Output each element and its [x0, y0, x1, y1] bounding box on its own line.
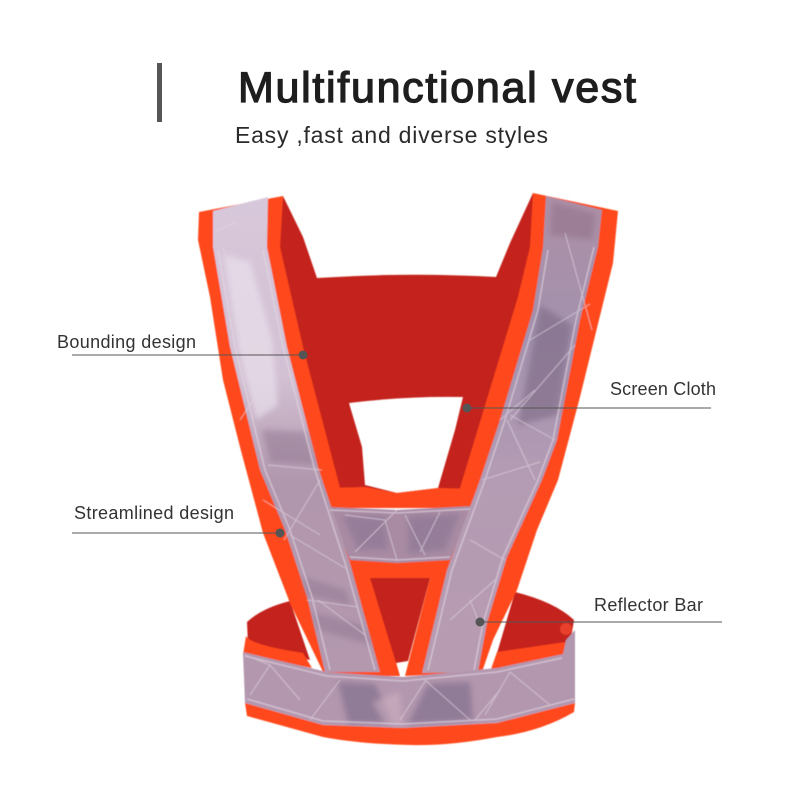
- callout: Screen Cloth: Screen Cloth: [610, 379, 716, 399]
- chest cross orange bands: [330, 487, 475, 578]
- waist red lining: [247, 592, 574, 660]
- accent bar: [157, 63, 162, 122]
- waist orange trim: [243, 623, 572, 672]
- title: Multifunctional vest: [238, 64, 636, 112]
- waist bottom orange trim: [245, 703, 575, 745]
- lower red triangle: [370, 578, 430, 663]
- back panel red: [270, 193, 540, 495]
- callout: Screen Cloth: [462, 379, 716, 412]
- left strap orange: [198, 196, 400, 676]
- callout: Bounding design: Bounding design: [57, 332, 196, 352]
- callout: Reflector Bar: [476, 595, 722, 626]
- callout: Streamlined design: [72, 503, 284, 538]
- callout: Reflector Bar: Reflector Bar: [594, 595, 703, 615]
- reflective stitching lines: [215, 222, 594, 724]
- right strap reflective: [422, 196, 602, 673]
- left strap reflective: [213, 197, 380, 672]
- right strap orange: [405, 193, 618, 676]
- callout: Streamlined design: Streamlined design: [74, 503, 234, 523]
- chest cross reflective: [328, 506, 472, 563]
- waist band reflective: [243, 630, 575, 728]
- vest illustration: [198, 193, 618, 745]
- subtitle: Easy ,fast and diverse styles: [235, 122, 548, 148]
- callout: Bounding design: [57, 332, 308, 360]
